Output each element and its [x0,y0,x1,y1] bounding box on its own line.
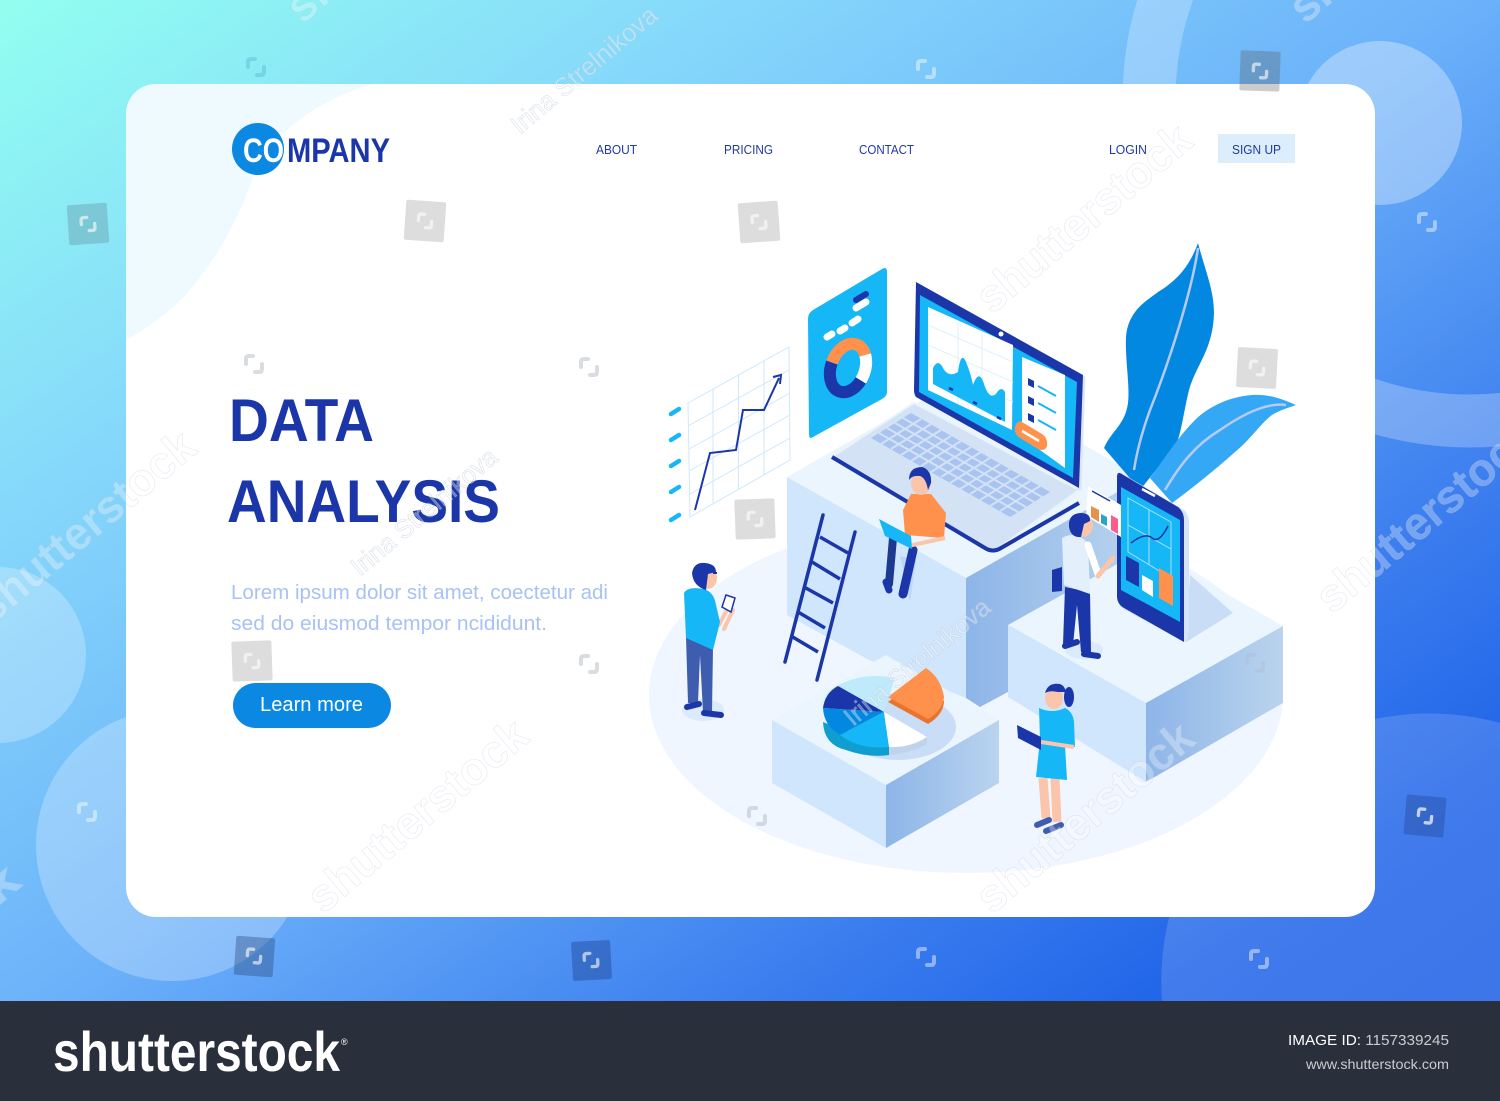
watermarks: author name: Irina Strelnikova [838,591,997,732]
title [227,387,500,535]
logo [232,123,390,175]
tall box [787,376,1142,707]
laptop [832,282,1083,552]
description text: Lorem ipsum dolor sit amet, coectetur adi [231,582,608,604]
watermarks: grey stamp squares [67,50,1447,981]
chart: line graph on grid [671,347,790,520]
navigation: SIGN UP [1232,143,1281,157]
description text [231,582,608,635]
watermarks: shutterstock: shutterstock [296,708,538,923]
button: learn more [233,683,391,728]
pie chart [823,668,956,760]
watermarks: shutterstock: shutterstock [965,710,1204,923]
right box [1008,548,1283,782]
person: standing with phone [682,563,735,721]
watermarks: author name [345,0,997,732]
leaves [1104,243,1296,503]
watermarks: shutterstock: shutterstock [965,112,1202,323]
illustration base ellipse [649,517,1283,873]
footer bar: IMAGE ID: 1157339245 [1288,1032,1449,1049]
card corner tint [126,84,372,340]
navigation [596,134,1295,163]
ladder [785,515,855,680]
watermarks: small marks [79,59,1435,967]
navigation: CONTACT [859,143,914,157]
logo: CO [243,132,284,170]
floating data card [1086,486,1121,537]
pie chart box [772,655,999,848]
navigation: LOGIN [1109,143,1147,157]
footer bar: www.shutterstock.com [1305,1056,1449,1072]
description text: sed do eiusmod tempor ncididunt. [231,613,547,635]
person: standing at phone [1052,513,1113,659]
footer bar [0,1001,1500,1101]
footer bar: shutterstock [53,1020,341,1083]
footer bar: ® [341,1037,348,1047]
panel: donut chart card [808,268,887,438]
navigation: PRICING [724,143,773,157]
panel: white landing page card [126,84,1375,917]
button: learn more: Learn more [260,694,363,716]
title: ANALYSIS [227,468,500,535]
phone [1117,473,1189,642]
person: sitting with laptop [879,467,946,602]
title: DATA [229,387,374,454]
watermarks: author name: Irina Strelnikova [505,0,664,140]
navigation: ABOUT [596,143,637,157]
watermarks: author name: Irina Strelnikova [345,441,504,582]
logo: MPANY [287,132,390,170]
person: woman with laptop [1017,684,1075,831]
